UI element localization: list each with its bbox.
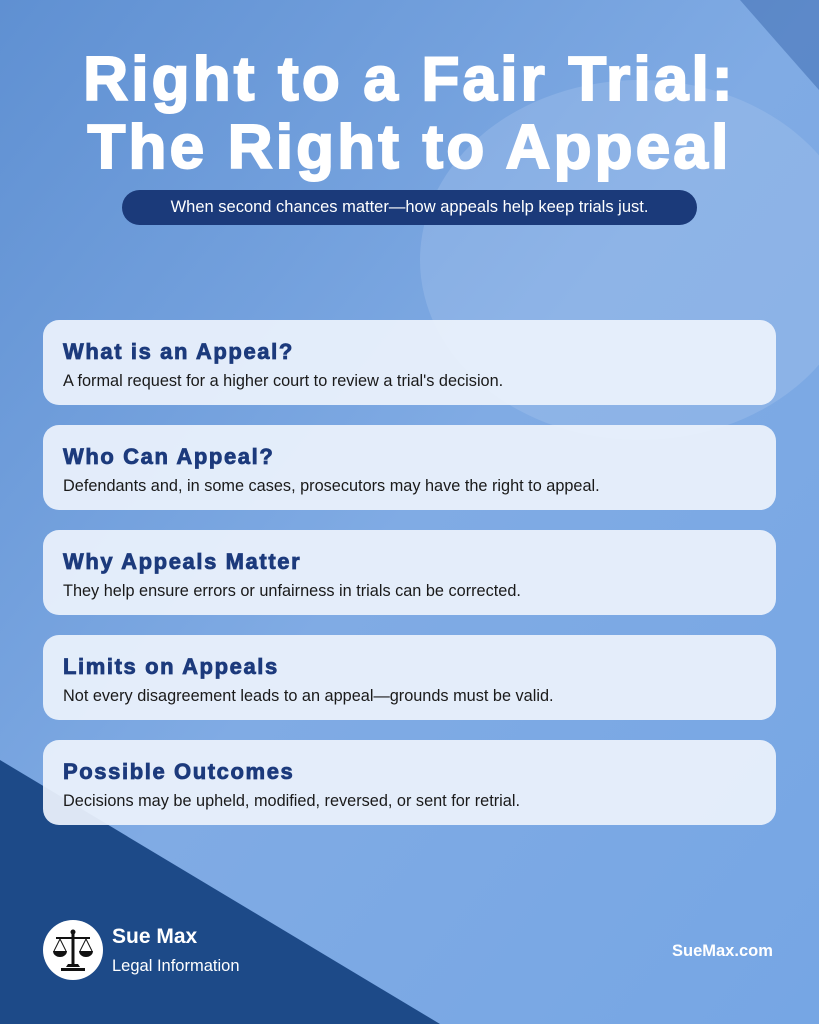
card: who can appeal [43,425,776,510]
subtitle pill: When second chances matter—how appeals help keep trials just. [171,198,648,216]
title: Right to a Fair Trial: [83,45,736,114]
card: why appeals matter: Why Appeals Matter [63,549,301,574]
icon: scales logo [43,920,103,980]
card: limits on appeals [43,635,776,720]
card: who can appeal: Defendants and, in some cases, prosecutors may have the right to appeal. [63,477,600,495]
card: possible outcomes [43,740,776,825]
brand text [112,925,240,975]
card: why appeals matter [43,530,776,615]
card: possible outcomes: Possible Outcomes [63,759,294,784]
title [83,45,736,182]
card: why appeals matter: They help ensure errors or unfairness in trials can be corrected. [63,582,521,600]
card: limits on appeals: Limits on Appeals [63,654,279,679]
card: what is an appeal: A formal request for a higher court to review a trial's decision. [63,372,503,390]
title: The Right to Appeal [87,113,732,182]
website: SueMax.com [672,942,773,960]
brand text: Sue Max [112,925,197,948]
brand text: Legal Information [112,957,240,975]
card: possible outcomes: Decisions may be upheld, modified, reversed, or sent for retrial. [63,792,520,810]
card: what is an appeal [43,320,776,405]
card: limits on appeals: Not every disagreement leads to an appeal—grounds must be valid. [63,687,554,705]
subtitle pill [122,190,697,225]
card: what is an appeal: What is an Appeal? [63,339,294,364]
card: who can appeal: Who Can Appeal? [63,444,274,469]
